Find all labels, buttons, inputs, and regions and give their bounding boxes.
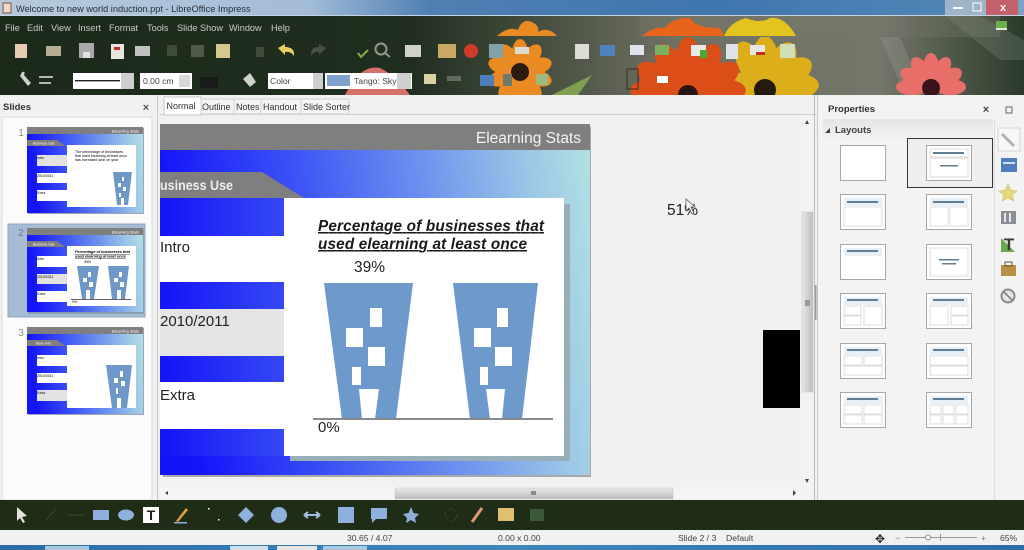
formatting toolbar — [20, 69, 668, 89]
horizontal scrollbar — [160, 487, 802, 499]
left navigation rows — [160, 236, 284, 456]
thumbnail slide 1: Business Use — [33, 142, 54, 146]
title bar: x — [1000, 2, 1007, 14]
menu bar: Insert — [78, 23, 101, 33]
menu bar: Edit — [27, 23, 43, 33]
object size: 0.00 x 0.00 — [498, 533, 541, 543]
thumbnail slide 3 — [27, 327, 144, 415]
formatting toolbar: 0.00 cm — [143, 76, 174, 86]
value label 0%: 0% — [318, 419, 340, 436]
slide number 2: 2 — [18, 228, 24, 239]
menu bar: Format — [109, 23, 139, 33]
layout: title and two rows — [926, 344, 972, 378]
layout: four cells — [840, 392, 886, 428]
fit icon: ✥ — [875, 532, 885, 546]
view tabs: Handout — [263, 102, 298, 112]
layout: centred text — [926, 244, 972, 280]
cursor position: 30.65 / 4.07 — [347, 533, 393, 543]
chart heading: Percentage of businesses that — [318, 218, 545, 235]
value label 39%: 39% — [354, 259, 385, 276]
slide number 3: 3 — [18, 328, 24, 339]
toolbar background with flower artwork — [0, 16, 1024, 95]
thumbnail slide 3: Extra — [37, 391, 45, 395]
thumbnail slide 3: More Info — [36, 342, 51, 346]
drawing toolbar: T — [147, 507, 156, 523]
section tab: usiness Use — [160, 178, 233, 193]
vertical scrollbar — [802, 115, 813, 500]
thumbnail slide 1 — [27, 127, 144, 214]
thumbnail slide 1: that used elearning at least once — [75, 154, 127, 158]
slide header text: Elearning Stats — [476, 130, 581, 147]
menu bar: View — [51, 23, 71, 33]
master slide name: Default — [726, 533, 754, 543]
zoom slider — [895, 533, 986, 543]
row label: Intro: Intro — [160, 239, 190, 256]
layout: title and subtitle — [926, 146, 972, 180]
slide gradient background — [160, 150, 590, 475]
thumbnail slide 2: Elearning Stats — [112, 230, 139, 234]
layout: one left, two stacked right — [926, 294, 972, 328]
thumbnail slide 2: Intro — [37, 257, 44, 261]
panel: properties — [818, 95, 1024, 500]
section tab — [160, 172, 304, 198]
slide shadow — [163, 127, 591, 477]
slide header bar — [160, 124, 590, 150]
thumbnail slide 1: Elearning Stats — [112, 128, 139, 134]
formatting toolbar: Tango: Sky — [354, 76, 397, 86]
menu bar: Tools — [147, 23, 169, 33]
thumbnail slide 1: Intro — [37, 156, 44, 160]
view tabs: Notes — [236, 102, 260, 112]
view tabs: Outline — [202, 102, 231, 112]
view tabs: Normal — [166, 101, 196, 111]
layouts section header — [823, 119, 993, 139]
properties heading: Properties — [828, 104, 875, 115]
thumbnail slide 3: 2010/2011 — [37, 374, 53, 378]
close slides panel: × — [143, 102, 149, 114]
chart heading — [318, 218, 545, 253]
layouts section header: Layouts — [835, 125, 871, 136]
sidebar icon: briefcase — [1001, 262, 1016, 276]
building chart: first bar — [324, 283, 413, 419]
black rectangle — [763, 330, 801, 408]
value label 51%: 51% — [667, 202, 698, 219]
panel: slides — [0, 95, 157, 500]
formatting toolbar: Color — [270, 76, 291, 86]
thumbnail slide 3: Elearning Stats — [112, 328, 139, 334]
sidebar icon: compass — [1002, 290, 1014, 302]
slides heading: Slides — [3, 102, 31, 113]
thumbnail slide 1: Extra — [37, 191, 45, 195]
menu bar: Slide Show — [177, 23, 223, 33]
chart heading: used elearning at least once — [318, 236, 527, 253]
selected layout frame — [908, 138, 992, 188]
thumbnail slide 2 — [27, 228, 144, 314]
white content panel — [284, 198, 564, 456]
panel shadow — [290, 204, 570, 461]
thumbnail slide 2: 0% — [72, 300, 77, 304]
layout: title and two columns — [926, 194, 972, 230]
sidebar icon: gallery — [1001, 211, 1016, 224]
thumbnail slide 2: used elearning at least once — [75, 254, 126, 258]
mouse cursor — [686, 199, 695, 214]
sidebar icon: text T: T — [1004, 235, 1015, 254]
zoom slider: − — [895, 533, 900, 543]
zoom slider: + — [981, 533, 986, 543]
sidebar icon: animation star — [999, 184, 1017, 201]
windows taskbar — [0, 545, 1024, 550]
slide canvas — [160, 124, 801, 477]
layout: title only — [840, 244, 886, 280]
sidebar icon: master slides — [1001, 158, 1017, 172]
status bar — [0, 530, 1024, 546]
row label: 2010/2011: 2010/2011 — [160, 313, 230, 330]
thumbnail slide 2: 39% — [84, 260, 91, 264]
layout: title and content — [840, 194, 886, 230]
thumbnail slide 1: The percentage of businesses — [75, 150, 123, 154]
row label: Extra: Extra — [160, 387, 196, 404]
slide indicator: Slide 2 / 3 — [678, 533, 716, 543]
menu bar: Window — [229, 23, 262, 33]
close properties panel: × — [983, 104, 989, 116]
building chart: second bar — [453, 283, 538, 419]
properties menu icon — [1006, 107, 1012, 113]
menu bar: Help — [271, 23, 290, 33]
sidebar separator — [994, 119, 995, 500]
thumbnail slide 1: has increased year on year — [75, 158, 119, 162]
standard toolbar icons — [15, 21, 1007, 59]
layout: two above, one below — [840, 344, 886, 378]
view tabs: Slide Sorter — [303, 102, 350, 112]
layout: six cells — [926, 392, 972, 428]
thumbnail slide 2: Business Use — [33, 242, 54, 246]
selected slide highlight — [8, 224, 145, 317]
sidebar icon: properties wrench — [998, 128, 1020, 151]
menu bar: File — [5, 23, 20, 33]
layout: two stacked left, one right — [840, 294, 886, 328]
layout: blank — [840, 146, 886, 180]
title bar — [0, 0, 1024, 16]
slide number 1: 1 — [18, 128, 24, 139]
thumbnail slide 2: Percentage of businesses that — [75, 250, 131, 254]
thumbnail slide 2: Extra — [37, 292, 45, 296]
panel separators — [157, 95, 158, 500]
drawing toolbar — [0, 500, 1024, 530]
panel divider — [814, 95, 818, 500]
menu bar — [5, 23, 290, 33]
thumbnail slide 3: Intro — [37, 356, 44, 360]
title bar: Welcome to new world induction.ppt - LibreOffice Impress — [16, 4, 251, 14]
thumbnail slide 1: 2010/2011 — [37, 174, 53, 178]
thumbnail slide 2: 2010/2011 — [37, 275, 53, 279]
view tabs — [160, 97, 816, 115]
chart baseline — [313, 418, 553, 420]
zoom value: 65% — [1000, 533, 1018, 543]
